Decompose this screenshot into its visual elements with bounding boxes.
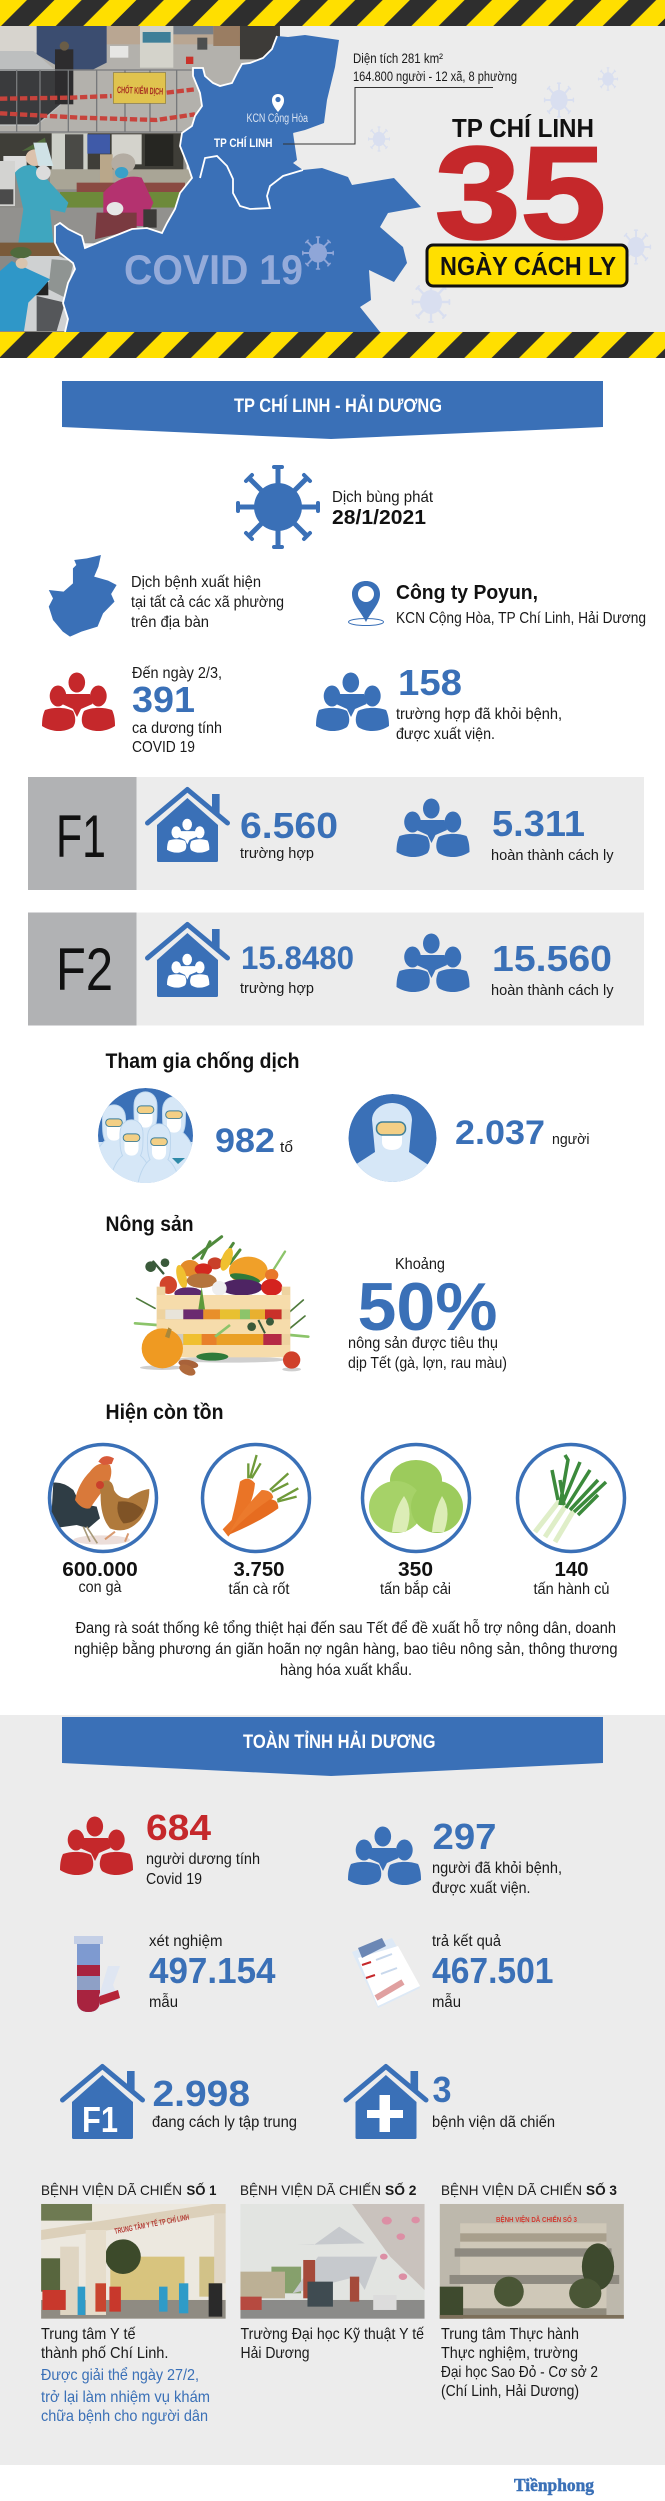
yellow label: so many days of quarantine — [427, 245, 627, 286]
hazard stripe top — [0, 0, 665, 26]
stat: 158 recovered: trường hợp đã khỏi bệnh, — [396, 706, 562, 723]
icon: people — [396, 798, 470, 857]
stat: 391 positive: Đến ngày 2/3, — [132, 665, 222, 682]
hazard stripe bottom — [0, 332, 665, 358]
heading: Nong san: Nông sản — [106, 1213, 194, 1236]
stat: 497.154 tests — [74, 1933, 276, 2012]
field hospital 1: Trung tâm Y tế — [41, 2326, 136, 2343]
panel: F1 — [28, 777, 644, 890]
section banner: Toan tinh Hai Duong: TOÀN TỈNH HẢI DƯƠNG — [243, 1731, 436, 1753]
area and population stats — [353, 51, 517, 84]
inventory: carrots — [202, 1444, 310, 1598]
icon: blue people — [316, 672, 389, 731]
all communes affected: Dịch bệnh xuất hiện — [131, 574, 261, 591]
paragraph: damage review and support proposal — [74, 1618, 618, 1679]
stat: 3 field hospitals: bệnh viện dã chiến — [432, 2114, 555, 2131]
icon: red people — [42, 672, 115, 731]
paragraph: damage review and support proposal: nghiệp bằng phương án giãn hoãn nợ ngân hàng, bao tiêu nông sản, thông thương — [74, 1639, 618, 1658]
inventory: green onion: tấn hành củ — [534, 1581, 610, 1598]
paragraph: damage review and support proposal: Đang rà soát thống kê tổng thiệt hại đến sau Tết để đề xuất hỗ trợ nông dân, doanh — [76, 1618, 616, 1637]
field hospital 3: Thực nghiệm, trường — [441, 2345, 578, 2362]
stat: 982 teams: 982 — [215, 1122, 275, 1160]
field hospital 3 — [440, 2181, 624, 2400]
inventory: carrots: tấn cà rốt — [228, 1581, 290, 1598]
heading: Tham gia chong dich: Tham gia chống dịch — [106, 1050, 300, 1073]
stat: 2.037 people — [455, 1114, 590, 1152]
stat: 158 recovered: 158 — [398, 662, 462, 703]
stat: 2.998 in quarantine: 2.998 — [152, 2073, 250, 2114]
stat: 297 recovered: được xuất viện. — [432, 1880, 530, 1897]
stat: 467.501 results: 467.501 — [432, 1950, 554, 1991]
stat: 684 positive — [60, 1807, 260, 1888]
inventory: chickens: 600.000 — [62, 1559, 138, 1581]
stat: 50% of produce sold: dịp Tết (gà, lợn, rau màu) — [348, 1355, 507, 1372]
area and population stats: Diện tích 281 km² — [353, 51, 443, 66]
icon: red people — [60, 1816, 133, 1875]
inventory: cabbage — [362, 1444, 470, 1598]
inventory: chickens: con gà — [78, 1579, 122, 1596]
stat: 467.501 results — [352, 1933, 554, 2011]
icon: house with people — [148, 924, 228, 997]
virus icon and COVID 19 map text: COVID 19 — [124, 246, 303, 293]
icon: blue people — [348, 1826, 421, 1885]
note: dissolved on 27/2: trở lại làm nhiệm vụ khám — [41, 2389, 210, 2406]
field hospital 2: BỆNH VIỆN DÃ CHIẾN — [240, 2182, 381, 2198]
stat: 50% of produce sold: nông sản được tiêu thụ — [348, 1335, 498, 1352]
section banner: TP Chi Linh - Hai Duong: TP CHÍ LINH - HẢI DƯƠNG — [234, 395, 442, 417]
Poyun company location — [348, 581, 646, 627]
all communes affected — [49, 555, 284, 637]
all communes affected: trên địa bàn — [131, 614, 209, 631]
field hospital 1: thành phố Chí Linh. — [41, 2345, 168, 2362]
stat: 497.154 tests: 497.154 — [149, 1950, 276, 1991]
field hospital 3: (Chí Linh, Hải Dương) — [441, 2383, 579, 2400]
outbreak date: 28/1/2021 — [332, 507, 426, 529]
icon: location pin — [348, 581, 384, 626]
heading: Hien con ton: Hiện còn tồn — [106, 1401, 224, 1424]
stat: 467.501 results: mẫu — [432, 1994, 461, 2011]
note: dissolved on 27/2: Được giải thể ngày 27/2, — [41, 2366, 199, 2384]
note: dissolved on 27/2 — [41, 2366, 210, 2425]
panel: F1: hoàn thành cách ly — [491, 847, 614, 864]
field hospital 3: SỐ 3 — [586, 2181, 617, 2198]
panel: F2: 15.8480 — [241, 940, 354, 976]
stat: 3 field hospitals: 3 — [432, 2069, 452, 2110]
stat: 2.998 in quarantine: đang cách ly tập trung — [152, 2114, 297, 2131]
map label: KCN Cong Hoa: KCN Cộng Hòa — [246, 113, 308, 125]
stat: 2.998 in quarantine — [62, 2066, 297, 2140]
sign text on the checkpoint photo: CHỐT KIỂM DỊCH — [117, 84, 163, 98]
panel: F2 — [28, 912, 644, 1026]
stat: 50% of produce sold: 50% — [358, 1269, 498, 1345]
icon: house with people — [148, 790, 228, 862]
title: TP Chi Linh: TP CHÍ LINH — [452, 113, 594, 143]
background virus decorations — [369, 68, 650, 322]
field hospital 1: BỆNH VIỆN DÃ CHIẾN — [41, 2182, 182, 2198]
stat: 391 positive — [42, 665, 222, 756]
panel: whole province section — [0, 1715, 665, 2465]
field hospital 3: Trung tâm Thực hành — [441, 2326, 579, 2343]
panel: F1: F1 — [56, 803, 106, 870]
big number 35: 35 — [435, 119, 606, 266]
field hospital 3: BỆNH VIỆN DÃ CHIẾN — [441, 2182, 582, 2198]
photo: Chi Linh medical centre gate — [41, 2204, 226, 2319]
stat: 297 recovered — [348, 1816, 562, 1897]
photo: university gate with peach blossom — [240, 2204, 425, 2319]
yellow label: so many days of quarantine: NGÀY CÁCH LY — [440, 251, 616, 281]
stat: 158 recovered: được xuất viện. — [396, 726, 495, 743]
icon: chickens — [50, 1444, 156, 1552]
field hospital 1: SỐ 1 — [186, 2181, 217, 2198]
field hospital 3: Đại học Sao Đỏ - Cơ sở 2 — [441, 2364, 598, 2381]
stat: 497.154 tests: mẫu — [149, 1994, 178, 2011]
field hospital 2: SỐ 2 — [385, 2181, 417, 2198]
icon: cabbage — [362, 1444, 470, 1552]
stat: 391 positive: COVID 19 — [132, 739, 195, 756]
section banner: Toan tinh Hai Duong — [62, 1717, 603, 1776]
photo collage: checkpoint street scenes — [0, 26, 300, 333]
stat: 50% of produce sold — [348, 1256, 507, 1372]
icon: carrots — [202, 1444, 310, 1552]
inventory: green onion — [518, 1444, 624, 1598]
paragraph: damage review and support proposal: hàng hóa xuất khẩu. — [280, 1661, 412, 1679]
icon: clipboard — [352, 1938, 420, 2008]
icon: house F1 — [62, 2066, 142, 2140]
stat: 158 recovered — [316, 662, 562, 743]
Poyun company location: Công ty Poyun, — [396, 582, 538, 604]
icon: group of medical workers — [98, 1088, 193, 1183]
icon: green onion — [518, 1444, 624, 1552]
logo: Tien Phong: Tiềnphong — [514, 2475, 594, 2495]
inventory: cabbage: 350 — [398, 1559, 433, 1581]
icon: medical worker — [348, 1094, 436, 1190]
inventory: chickens — [50, 1444, 156, 1596]
leader line from map to area stats — [283, 88, 493, 144]
map label: TP Chi Linh: TP CHÍ LINH — [214, 137, 272, 150]
inventory: carrots: 3.750 — [234, 1559, 284, 1581]
icon: Chi Linh silhouette — [49, 555, 117, 637]
panel: F2: F2 — [56, 936, 113, 1003]
stat: 391 positive: ca dương tính — [132, 720, 222, 737]
panel: F1: 6.560 — [240, 805, 338, 846]
panel: F1: trường hợp — [240, 845, 314, 862]
panel: F2: 15.560 — [492, 938, 612, 979]
stat: 497.154 tests: xét nghiệm — [149, 1933, 222, 1950]
section banner: TP Chi Linh - Hai Duong — [62, 381, 603, 439]
panel: F2: hoàn thành cách ly — [491, 982, 614, 999]
stat: 2.037 people: người — [552, 1131, 590, 1148]
stat: 2.037 people: 2.037 — [455, 1114, 545, 1152]
field hospital 1 — [41, 2181, 226, 2425]
field hospital 2: Hải Dương — [240, 2345, 310, 2362]
note: dissolved on 27/2: chữa bệnh cho người dân — [41, 2408, 208, 2425]
stat: 391 positive: 391 — [132, 679, 195, 720]
stat: 297 recovered: người đã khỏi bệnh, — [432, 1860, 562, 1877]
icon: test tube — [74, 1936, 120, 2012]
illustration: vegetable crate — [135, 1237, 308, 1378]
map pin: KCN Cong Hoa — [272, 94, 284, 112]
icon: house with plus — [346, 2066, 426, 2139]
sign on building: BỆNH VIỆN DÃ CHIẾN SỐ 3 — [496, 2214, 577, 2224]
stat: 684 positive: người dương tính — [146, 1851, 260, 1868]
stat: 684 positive: Covid 19 — [146, 1871, 202, 1888]
area and population stats: 164.800 người - 12 xã, 8 phường — [353, 69, 517, 84]
panel: F1: 5.311 — [492, 803, 585, 844]
stat: 684 positive: 684 — [146, 1807, 211, 1848]
field hospital 2 — [240, 2181, 425, 2362]
icon: virus — [238, 467, 318, 547]
stat: 50% of produce sold: Khoảng — [395, 1256, 445, 1273]
photo: training centre building — [440, 2204, 624, 2319]
panel: F2: trường hợp — [240, 980, 314, 997]
icon: house F1: F1 — [82, 2099, 118, 2140]
stat: 3 field hospitals — [346, 2066, 555, 2139]
sign on photo: TRUNG TÂM Y TẾ TP CHÍ LINH — [113, 2212, 190, 2236]
field hospital 2: Trường Đại học Kỹ thuật Y tế — [240, 2326, 424, 2343]
outbreak date — [238, 467, 434, 547]
stat: 297 recovered: 297 — [432, 1816, 496, 1857]
outbreak date: Dịch bùng phát — [332, 489, 434, 506]
map of Hai Duong with TP Chi Linh — [55, 35, 421, 332]
stat: 982 teams: tổ — [280, 1139, 293, 1156]
icon: people — [396, 934, 470, 992]
stat: 467.501 results: trả kết quả — [432, 1933, 501, 1950]
header banner — [0, 0, 665, 358]
all communes affected: tại tất cả các xã phường — [131, 594, 284, 611]
inventory: green onion: 140 — [554, 1559, 588, 1581]
inventory: cabbage: tấn bắp cải — [380, 1579, 451, 1598]
